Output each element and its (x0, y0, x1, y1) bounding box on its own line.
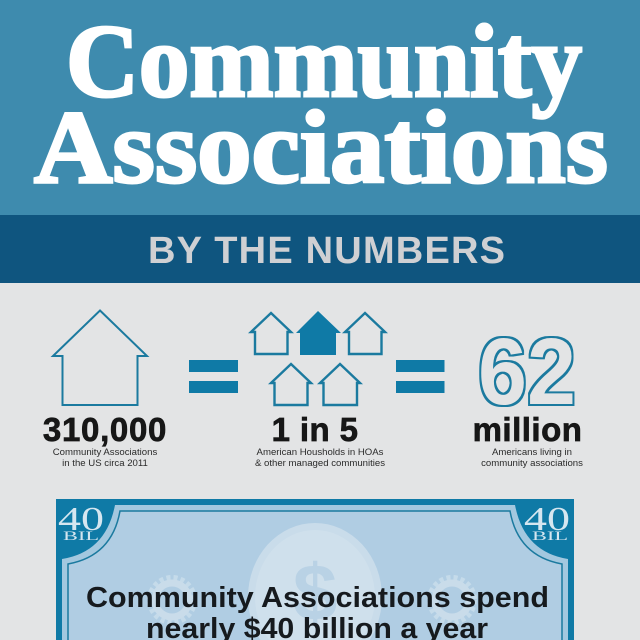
stat: 310,000 (43, 411, 167, 469)
header banner (0, 0, 640, 215)
stat: 310,000: 310,000 (43, 411, 167, 448)
stat: 1 in 5: & other managed communities (255, 458, 385, 469)
title (34, 4, 608, 205)
stat: million: Americans living in (492, 447, 572, 458)
title: Associations (34, 90, 608, 205)
corner: top left (58, 501, 104, 543)
stat: 310,000: Community Associations (53, 447, 157, 458)
icon: right gear (430, 578, 474, 622)
medallion with dollar sign: $ (293, 548, 337, 637)
corner: top left: BIL (63, 528, 99, 543)
corner: top right: 40 (524, 501, 570, 538)
stat: million: community associations (481, 458, 583, 469)
medallion with dollar sign (248, 523, 382, 640)
title: Community (66, 4, 582, 119)
panel: banknote (56, 499, 574, 640)
banknote text (86, 582, 549, 640)
icon: equals sign left (189, 360, 238, 393)
stat: 1 in 5: 1 in 5 (272, 411, 358, 448)
stat: 1 in 5 (255, 411, 385, 469)
corner: top right: BIL (532, 528, 568, 543)
icon: five houses, one filled (251, 311, 385, 405)
subtitle band: BY THE NUMBERS (148, 230, 505, 272)
subtitle band (0, 215, 640, 283)
stat: 310,000: in the US circa 2011 (62, 458, 148, 469)
icon: left gear (150, 578, 194, 622)
corner: top right (524, 501, 570, 543)
stat: million (473, 411, 583, 469)
icon: equals sign right (396, 360, 444, 393)
stat: million: million (473, 411, 582, 448)
outlined number 62: 62 (478, 319, 576, 425)
banknote text: Community Associations spend (86, 582, 549, 614)
corner: top left: 40 (58, 501, 104, 538)
stat: 1 in 5: American Housholds in HOAs (257, 447, 384, 458)
icon: large house (53, 310, 147, 405)
